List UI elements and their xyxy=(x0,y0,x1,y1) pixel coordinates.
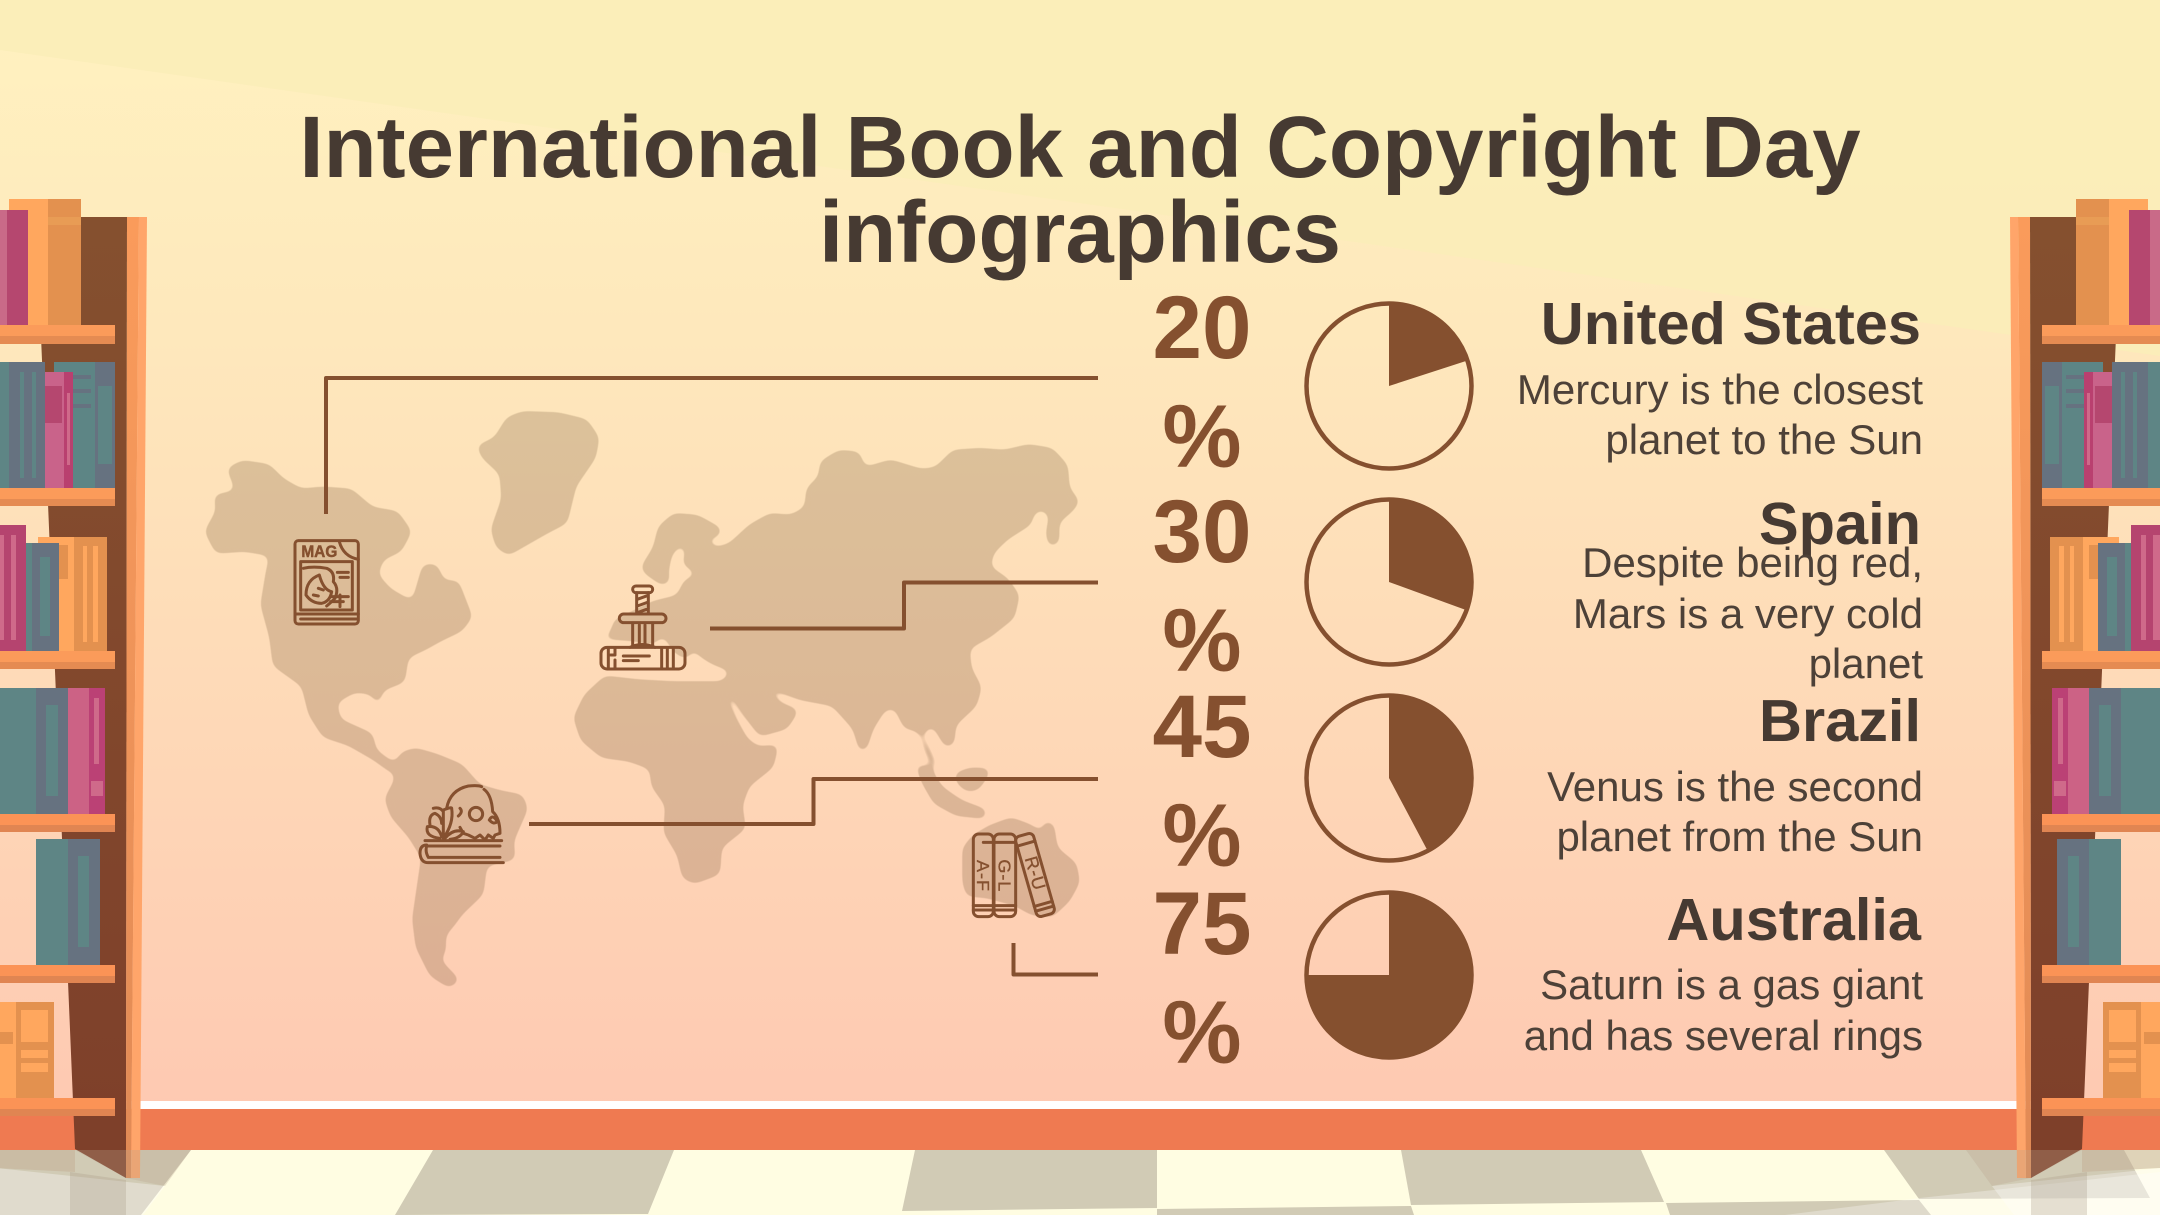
icon: three books xyxy=(973,832,1055,918)
map: Eurasia and Africa xyxy=(573,444,1080,884)
icon: magazine xyxy=(295,541,358,624)
map: Australia xyxy=(962,817,1080,917)
text block: United States: Mercury is the closest xyxy=(1517,366,1923,413)
percentage: 75% xyxy=(1152,873,1252,1082)
bookshelf: right xyxy=(1966,199,2160,1215)
percentage: 30%: % xyxy=(1162,590,1242,690)
map: Borneo xyxy=(954,767,990,792)
percentage: 45% xyxy=(1152,676,1252,885)
percentage: 75%: % xyxy=(1162,982,1242,1082)
pie chart: 45% xyxy=(1306,695,1472,860)
icon: three books: A-F xyxy=(973,860,993,892)
map: South America xyxy=(384,748,528,988)
connector: Spain xyxy=(710,582,1098,628)
title: International Book and Copyright Day xyxy=(299,99,1861,196)
text block: Brazil: Brazil xyxy=(1759,687,1921,754)
percentage: 20% xyxy=(1152,277,1252,486)
text block: Spain: Mars is a very cold xyxy=(1573,590,1923,637)
text block: United States: United States xyxy=(1541,290,1921,357)
text block: Spain: Spain xyxy=(1759,490,1921,557)
connector: United States xyxy=(326,378,1098,514)
percentage: 20%: 20 xyxy=(1152,277,1252,377)
percentage: 20%: % xyxy=(1162,386,1242,486)
text block: Brazil xyxy=(1547,687,1923,860)
text block: Australia: Saturn is a gas giant xyxy=(1540,961,1923,1008)
checkered floor xyxy=(0,1150,2160,1215)
icon: skull on book xyxy=(420,786,503,863)
icon: magazine: MAG xyxy=(301,542,337,561)
text block: Australia: Australia xyxy=(1666,886,1922,953)
text block: Brazil: planet from the Sun xyxy=(1556,813,1923,860)
percentage: 30% xyxy=(1152,481,1252,690)
bookshelf: left xyxy=(0,199,191,1215)
title: infographics xyxy=(819,184,1341,281)
percentage: 75%: 75 xyxy=(1152,873,1252,973)
text block: Australia: and has several rings xyxy=(1524,1012,1923,1059)
connector: Brazil xyxy=(529,779,1098,824)
text block: Australia xyxy=(1524,886,1923,1059)
text block: United States xyxy=(1517,290,1923,463)
text block: Spain: planet xyxy=(1809,640,1923,687)
pie chart: 75% xyxy=(1306,892,1472,1058)
percentage: 45%: % xyxy=(1162,785,1242,885)
connector: Australia xyxy=(1014,943,1098,974)
percentage: 45%: 45 xyxy=(1152,676,1252,776)
text block: Brazil: Venus is the second xyxy=(1547,763,1923,810)
pie chart: 30% xyxy=(1306,499,1472,664)
percentage: 30%: 30 xyxy=(1152,481,1252,581)
text block: United States: planet to the Sun xyxy=(1605,416,1923,463)
map: Greenland xyxy=(476,411,599,556)
text block: Spain xyxy=(1573,490,1923,687)
wall light wedge xyxy=(0,0,2160,356)
icon: three books: R-U xyxy=(1021,854,1050,893)
pie chart: 20% xyxy=(1306,303,1472,468)
world map xyxy=(204,411,1080,988)
icon: sword on book xyxy=(601,586,685,669)
map: Indonesia xyxy=(915,764,987,819)
icon: three books: G-L xyxy=(995,859,1015,892)
map: North America xyxy=(204,460,473,773)
text block: Spain: Despite being red, xyxy=(1582,539,1923,586)
title xyxy=(299,99,1861,281)
baseboard xyxy=(0,1101,2160,1150)
